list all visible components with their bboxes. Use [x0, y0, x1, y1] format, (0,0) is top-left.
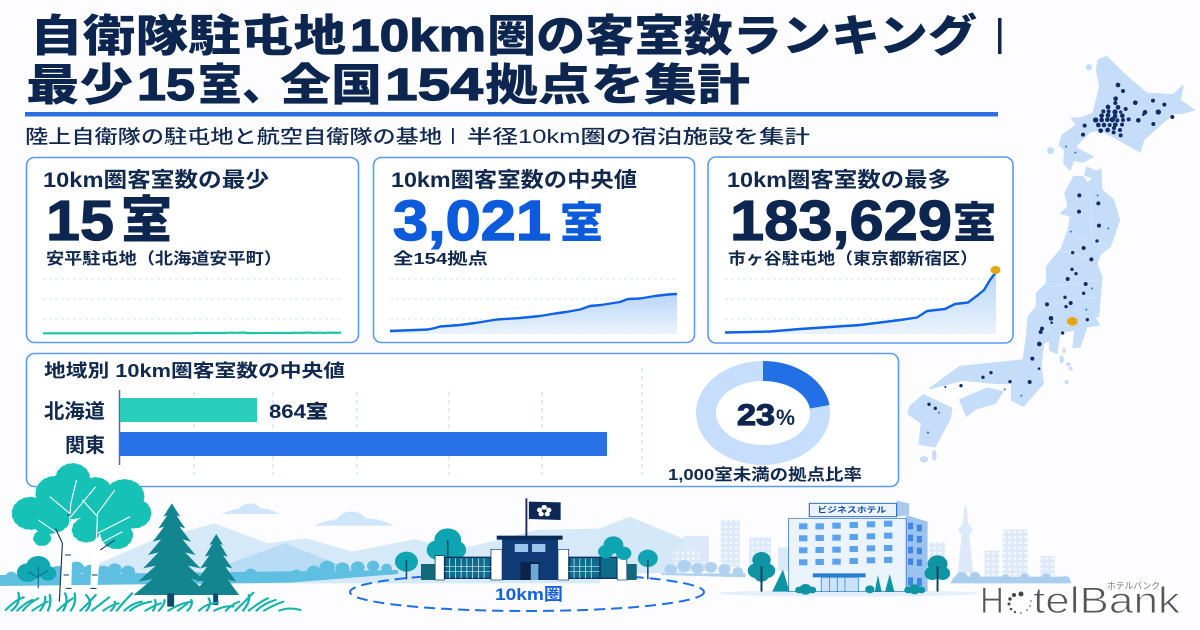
islands — [908, 57, 1194, 462]
title: 全国 — [280, 61, 382, 110]
big number: 3,021 — [393, 189, 551, 253]
title: 拠点を集計 — [485, 61, 750, 110]
right skyline — [929, 507, 1055, 577]
logo: HotelBank: ホテルバンク — [1107, 581, 1160, 591]
right part of gate — [600, 556, 637, 580]
highlight dot — [990, 266, 1000, 274]
big number — [393, 189, 603, 253]
fence right — [569, 557, 600, 578]
logo: HotelBank: H — [980, 580, 1004, 621]
panel: regional median — [26, 354, 898, 486]
title: 15 — [137, 59, 195, 110]
hotel sign: ビジネスホテル — [817, 504, 887, 514]
big number: 室 — [953, 200, 996, 248]
10km ring label: 10km圏 — [495, 585, 563, 604]
dots: bases — [927, 83, 1174, 410]
mountain and skyline left — [600, 517, 686, 573]
prefecture lines — [1027, 197, 1110, 333]
illustration: forest and mountains — [0, 466, 600, 611]
clouds — [222, 503, 394, 526]
subtitle — [25, 126, 810, 148]
flag — [525, 498, 561, 537]
mountains — [92, 523, 600, 583]
donut label: 1,000室未満の拠点比率 — [668, 465, 862, 484]
bar: Hokkaido — [44, 398, 328, 423]
hotel windows — [799, 521, 892, 565]
big number: 室 — [121, 192, 172, 249]
hotel — [789, 501, 928, 592]
title: 154 — [385, 59, 483, 110]
bar chart — [44, 368, 642, 475]
subtitle: 半径10km圏の宿泊施設を集計 — [467, 126, 810, 148]
big number: 室 — [560, 200, 603, 248]
fir trees — [134, 503, 239, 595]
title underline — [25, 112, 998, 116]
illustration: garrison — [395, 498, 600, 580]
bar: Kanto — [65, 432, 607, 457]
panel: maximum rooms — [708, 157, 1013, 343]
ground — [719, 590, 979, 597]
chart: flat line — [43, 279, 341, 333]
trees — [395, 528, 466, 572]
fence left — [445, 557, 491, 578]
subtitle: 陸上自衛隊の駐屯地と航空自衛隊の基地 — [25, 126, 442, 148]
big number: 183,629 — [730, 189, 952, 253]
location: 安平駐屯地（北海道安平町） — [46, 249, 282, 268]
donut chart: % — [776, 405, 795, 430]
donut chart: 23 — [737, 399, 775, 432]
bar: Kanto: 関東 — [65, 434, 105, 457]
title: 自衛隊駐屯地 — [30, 12, 346, 61]
logo: HotelBank: telBank — [1033, 580, 1181, 621]
card heading: 10km圏客室数の最少 — [43, 169, 269, 192]
big number: 15 — [46, 189, 114, 253]
panel: minimum rooms — [26, 158, 358, 342]
birch trees — [15, 466, 148, 602]
headquarters building — [491, 536, 569, 580]
bar: Hokkaido: 北海道 — [44, 400, 105, 423]
dots: small bases — [927, 146, 1109, 434]
card heading: 10km圏客室数の最多 — [727, 169, 951, 192]
chart: median curve — [390, 279, 677, 334]
location: 全154拠点 — [393, 249, 488, 268]
title — [26, 10, 1002, 110]
location: 市ヶ谷駐屯地（東京都新宿区） — [728, 249, 978, 268]
title: 圏の客室数ランキング — [487, 11, 977, 61]
donut chart — [696, 361, 830, 465]
bar: Hokkaido: 864室 — [269, 400, 328, 423]
grass — [6, 593, 300, 611]
highlight: Ichigaya — [1067, 317, 1078, 326]
hotel trees and shrubs — [748, 552, 950, 595]
map of Japan — [908, 57, 1194, 462]
trees by gate — [598, 536, 658, 567]
panel heading: 地域別 10km圏客室数の中央値 — [44, 361, 345, 381]
title: 最少 — [26, 61, 133, 110]
gate left — [421, 564, 435, 580]
title: 室、 — [198, 61, 286, 110]
logo dots — [1008, 592, 1032, 614]
big number — [46, 189, 172, 253]
panel: median rooms — [374, 158, 694, 342]
tree line — [0, 561, 398, 586]
card heading: 10km圏客室数の中央値 — [391, 169, 637, 192]
logo: HotelBank — [980, 580, 1181, 621]
entrance — [821, 577, 858, 592]
shrub — [17, 556, 56, 582]
chart: maximum curve — [725, 266, 1000, 334]
title: 10km — [350, 10, 486, 61]
illustration: city and hotel — [598, 501, 1071, 597]
10km ring — [350, 573, 704, 611]
